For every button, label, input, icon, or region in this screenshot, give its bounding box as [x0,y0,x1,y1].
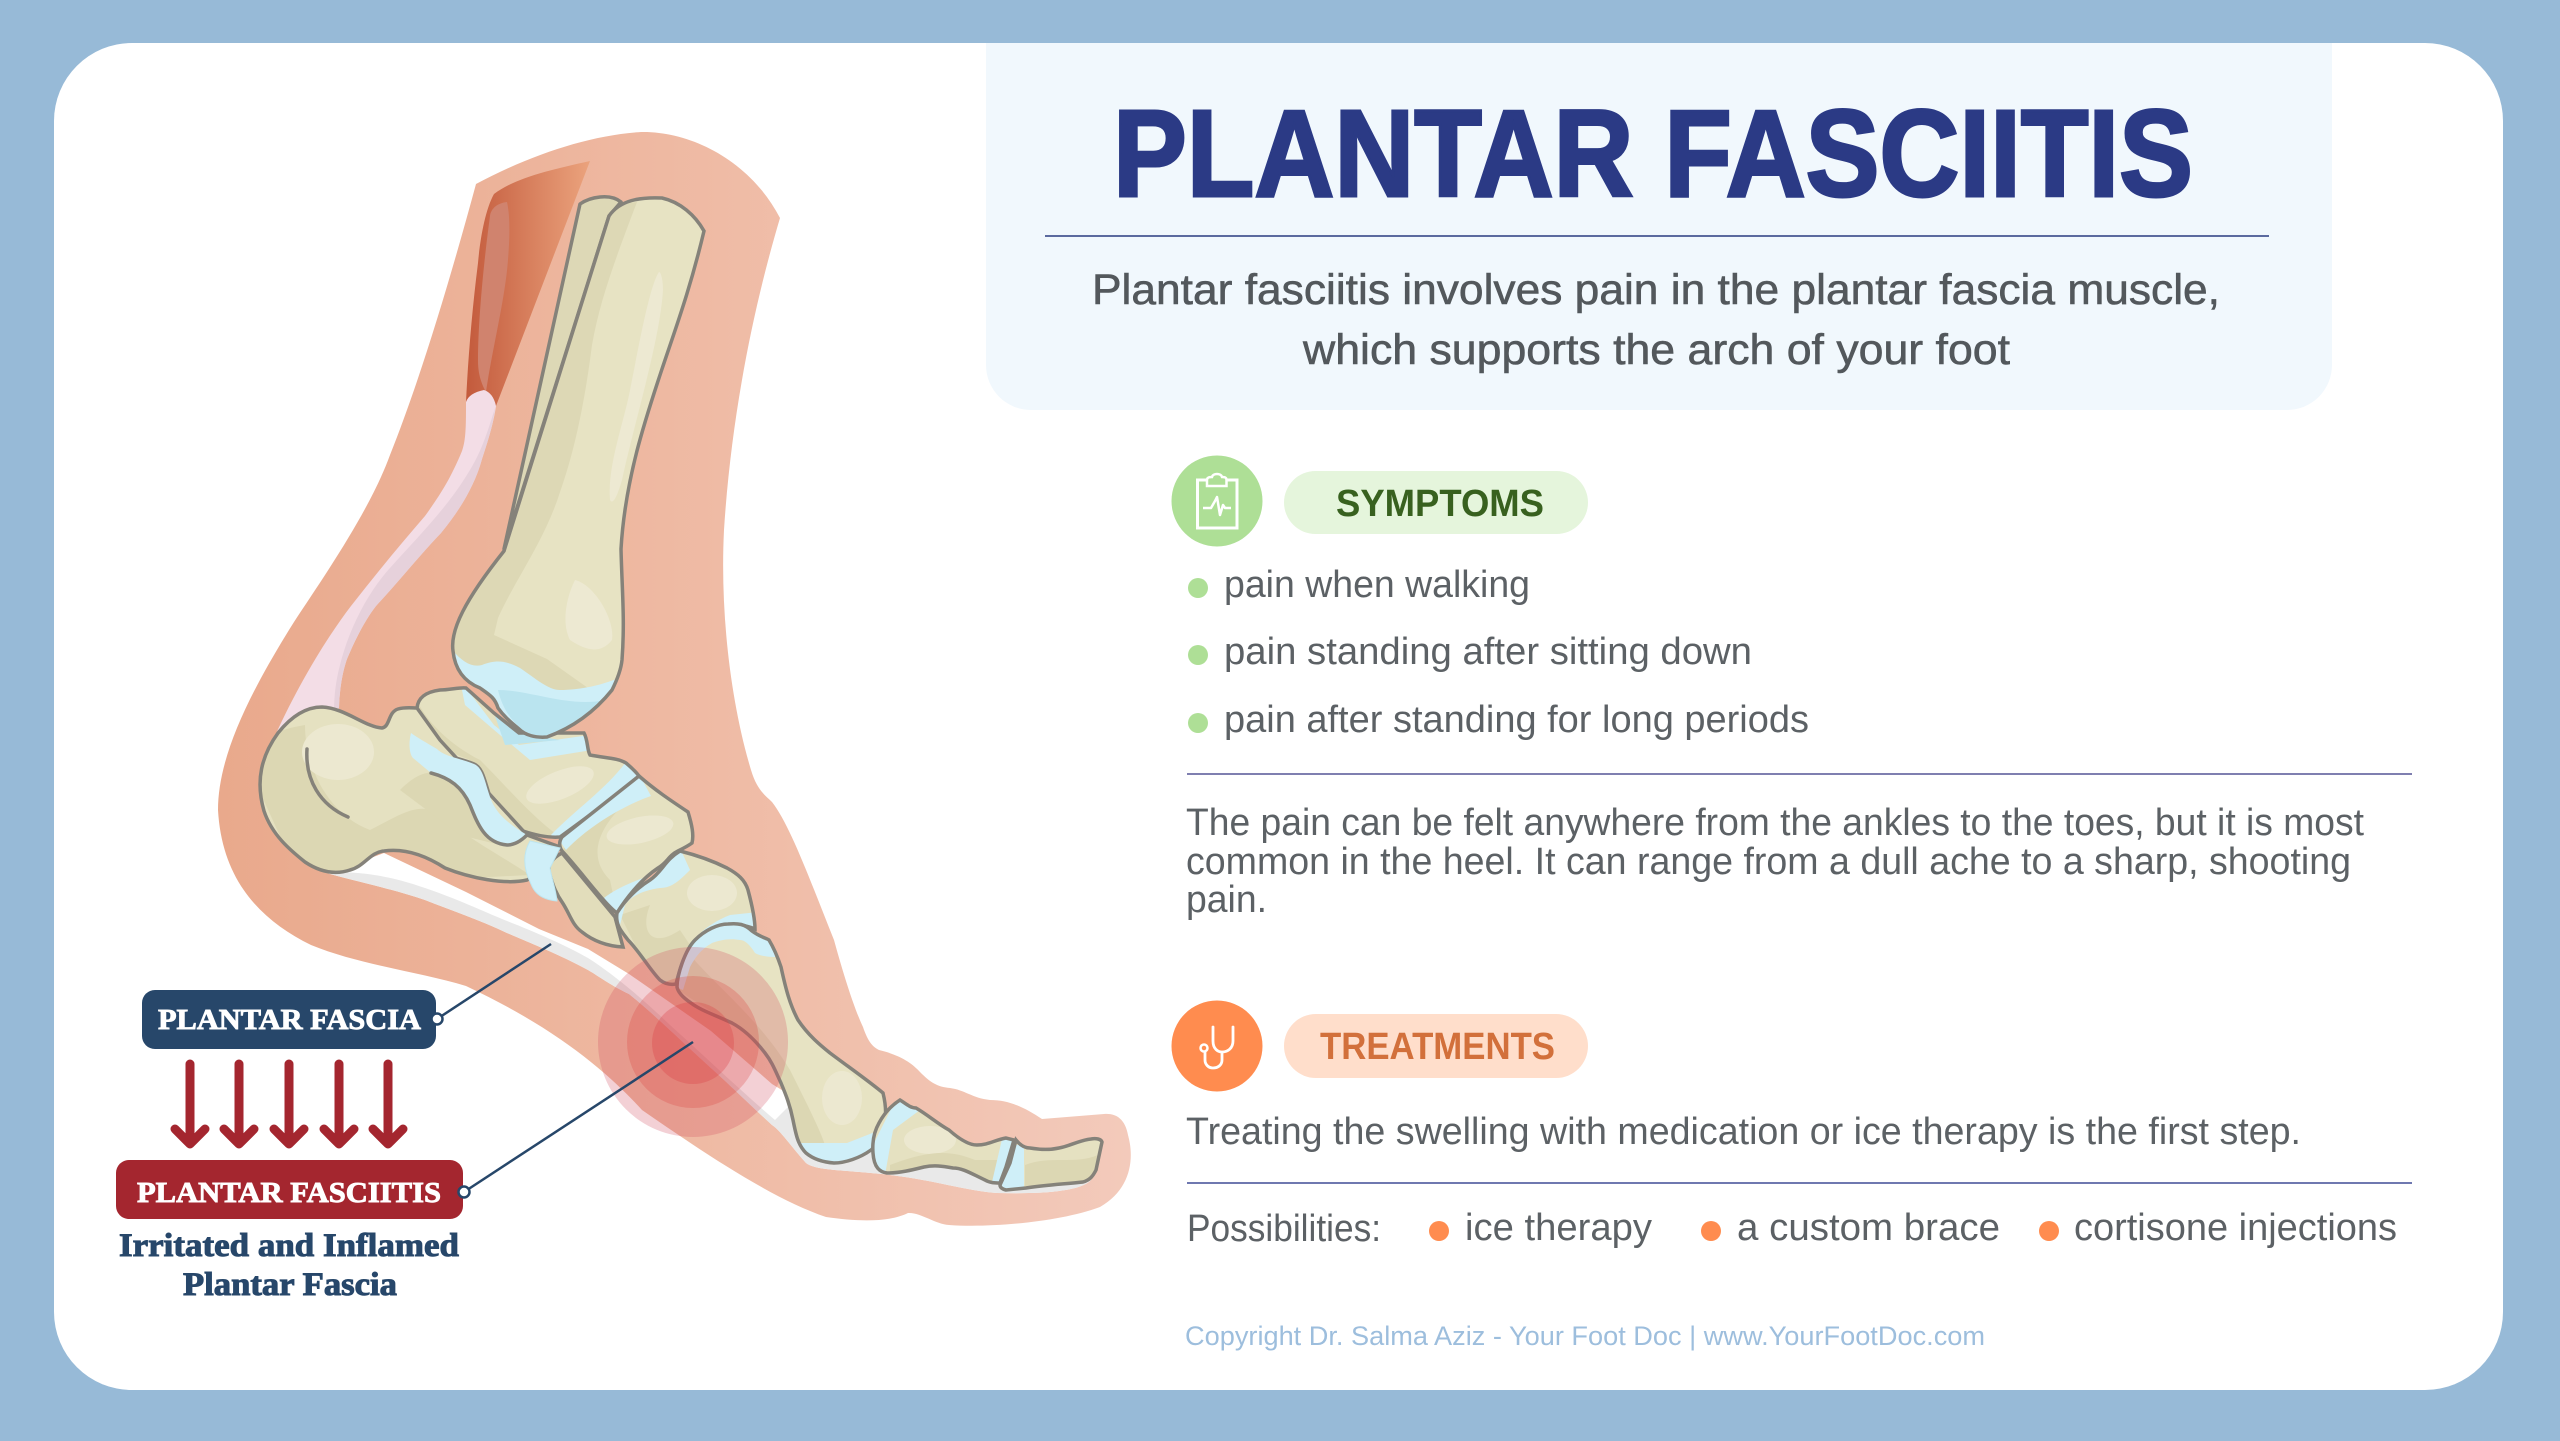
calcaneus heel bone [250,707,560,882]
treatments heading with stethoscope icon [1172,1000,1588,1092]
arrows: five downward red arrows [175,1064,403,1144]
subtitle [1092,266,2220,374]
symptoms bullet list [1188,564,1809,741]
achilles tendon [271,390,496,745]
skin silhouette [218,132,1131,1226]
treatment possibilities row [1187,1207,2397,1250]
title panel [986,43,2332,410]
subtitle: Plantar fasciitis involves pain in the plantar fascia muscle, [1092,266,2220,314]
callout: plantar fasciitis label: PLANTAR FASCIITIS [137,1177,441,1209]
symptoms description paragraph [1186,802,2364,921]
copyright footer: Copyright Dr. Salma Aziz - Your Foot Doc | www.YourFootDoc.com [1185,1321,1985,1351]
treatment possibilities row: a custom brace [1737,1207,2000,1249]
treatments heading with stethoscope icon: TREATMENTS [1320,1026,1555,1068]
caption under fasciitis label: Irritated and Inflamed [119,1228,459,1264]
fibula bone [504,197,621,549]
treatment possibilities row: ice therapy [1465,1207,1652,1249]
plantar fascia band [323,853,1091,1193]
tibia bone [440,198,704,750]
distal toe phalanx [998,1139,1102,1192]
treatment possibilities row: cortisone injections [2074,1207,2397,1249]
symptoms description paragraph: common in the heel. It can range from a dull ache to a sharp, shooting [1186,841,2351,883]
foot anatomy illustration [218,132,1131,1226]
symptoms bullet list: pain standing after sitting down [1224,631,1752,673]
icon: stethoscope [1172,1000,1262,1092]
symptoms description paragraph: pain. [1186,879,1267,921]
navicular bone [558,774,694,914]
treatment possibilities row: Possibilities: [1187,1208,1381,1250]
callout: plantar fascia label [142,944,551,1049]
caption under fasciitis label: Plantar Fascia [183,1267,397,1303]
calf muscle [466,161,590,406]
symptoms heading with clipboard icon [1172,456,1588,546]
caption under fasciitis label [119,1228,459,1303]
treatments intro sentence: Treating the swelling with medication or ice therapy is the first step. [1186,1111,2301,1153]
talus bone [417,680,642,842]
second cuneiform bone [612,848,758,990]
symptoms bullet list: pain when walking [1224,564,1530,606]
callout: plantar fasciitis label [116,1042,693,1219]
inflammation rings [598,947,788,1137]
cuneiform bone [549,853,623,947]
callout: plantar fascia label: PLANTAR FASCIA [158,1004,421,1036]
subtitle: which supports the arch of your foot [1302,326,2010,374]
icon: clipboard [1172,456,1262,546]
symptoms bullet list: pain after standing for long periods [1224,699,1809,741]
title: PLANTAR FASCIITIS [1113,86,2193,223]
symptoms description paragraph: The pain can be felt anywhere from the ankles to the toes, but it is most [1186,802,2364,844]
proximal toe phalanx [868,1095,1015,1186]
midfoot blue cartilage [525,841,560,901]
symptoms heading with clipboard icon: SYMPTOMS [1336,483,1544,525]
metatarsal bone [670,915,886,1170]
